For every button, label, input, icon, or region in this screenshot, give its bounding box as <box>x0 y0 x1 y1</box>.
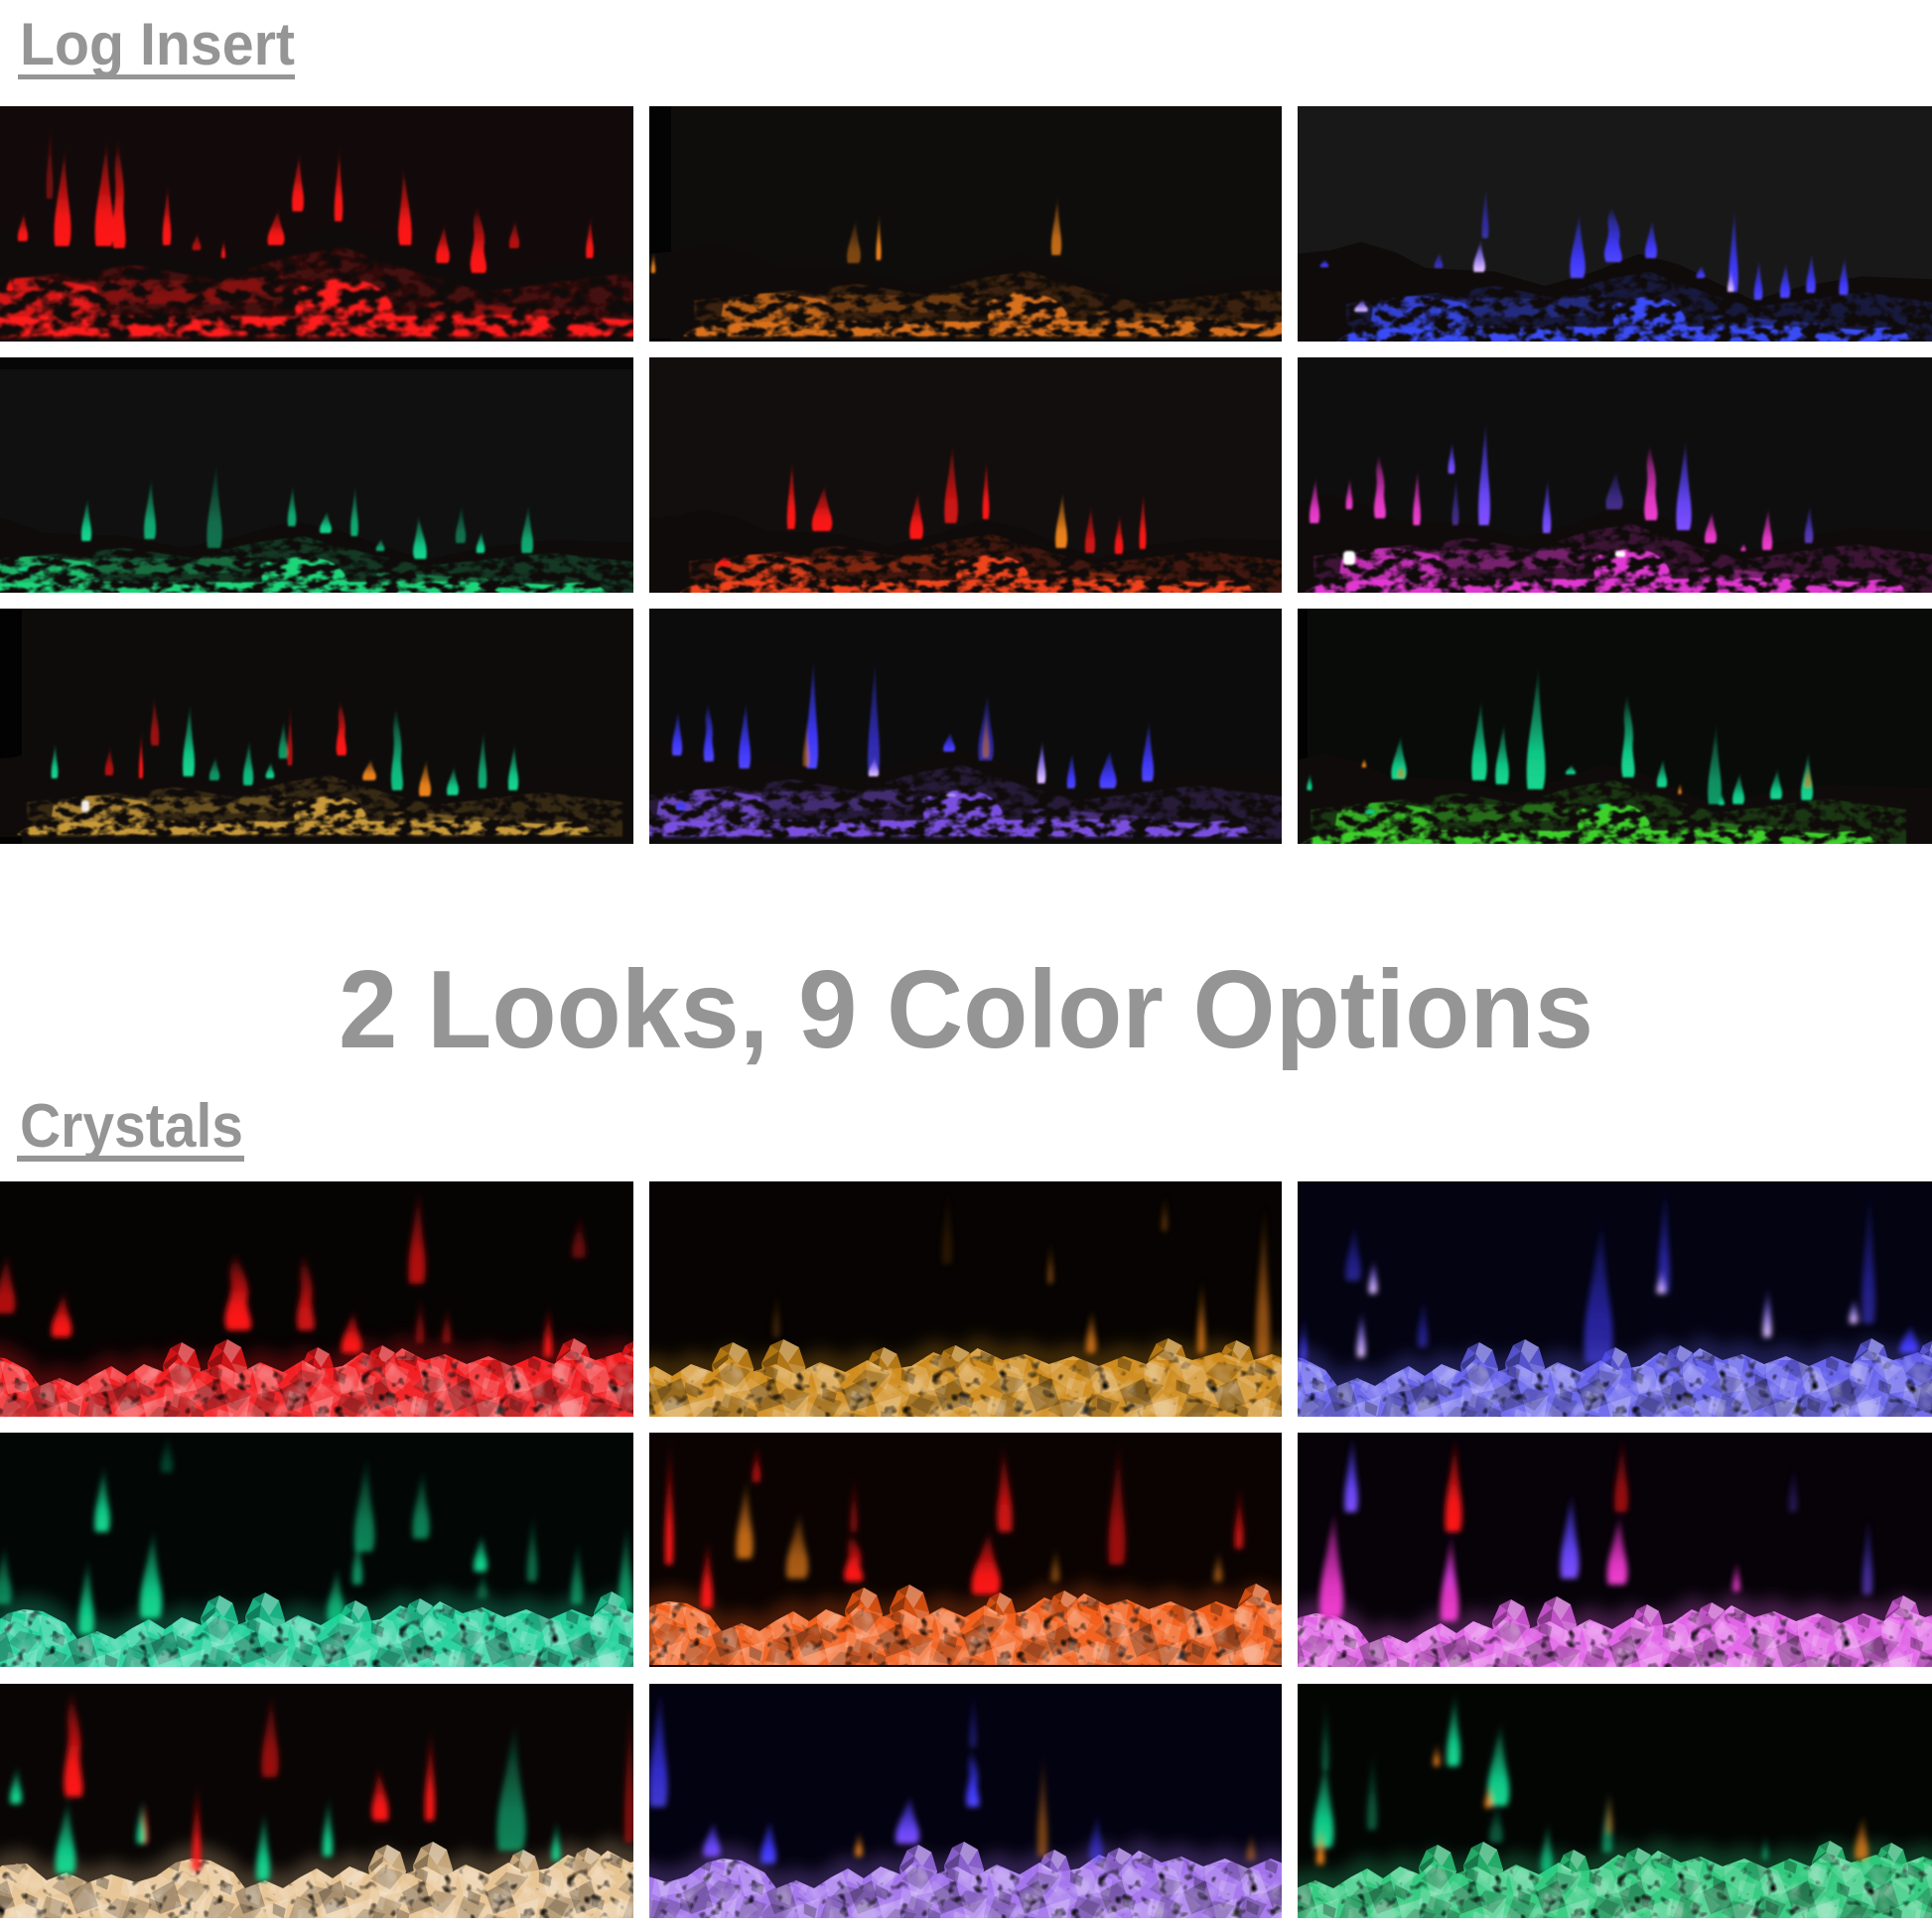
main heading: 2 Looks, 9 Color Options <box>339 948 1593 1071</box>
panel: crystals red <box>0 1181 633 1417</box>
panel: log insert green <box>0 357 633 593</box>
panel: log insert green multi <box>1298 609 1932 844</box>
panel: crystals gold multi <box>0 1684 633 1918</box>
panel: log insert amber <box>649 106 1282 342</box>
panel: crystals blue <box>1298 1181 1932 1417</box>
panel: log insert magenta <box>1298 357 1932 593</box>
panel: log insert blue <box>1298 106 1932 342</box>
panel: crystals magenta <box>1298 1433 1932 1667</box>
panel: log insert violet <box>649 609 1282 844</box>
panel: crystals green <box>0 1433 633 1667</box>
panel: crystals green orange <box>1298 1684 1932 1918</box>
panel: log insert gold multi <box>0 609 633 844</box>
panel: crystals violet <box>649 1684 1282 1918</box>
panel: crystals orange <box>649 1433 1282 1667</box>
heading: Log Insert: Log Insert <box>20 11 295 77</box>
panel: log insert red-orange <box>649 357 1282 593</box>
panel: crystals amber <box>649 1181 1282 1417</box>
panel: log insert red <box>0 106 633 342</box>
heading: Crystals: Crystals <box>20 1092 243 1161</box>
